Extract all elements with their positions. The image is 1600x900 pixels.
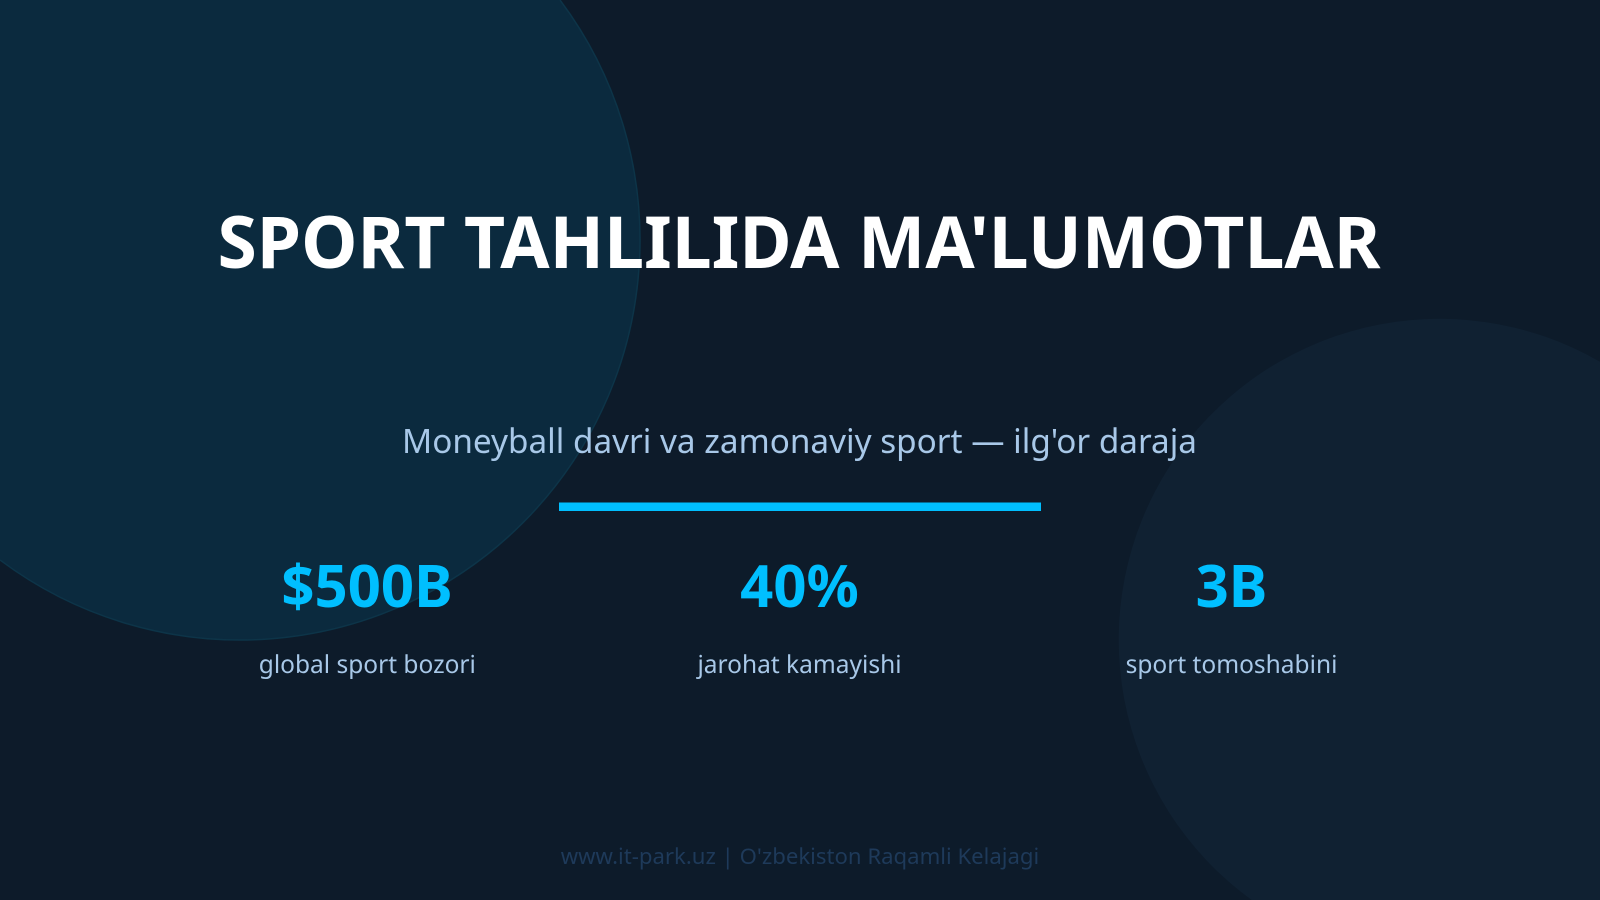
stat value: 40%: 40% bbox=[740, 545, 859, 624]
stat value: $500B: $500B bbox=[281, 545, 453, 624]
subtitle: Moneyball davri va zamonaviy sport — ilg'or daraja bbox=[402, 417, 1197, 463]
accent bar bbox=[559, 502, 1041, 511]
stat: global sport market bbox=[259, 545, 476, 681]
stat: sport audience bbox=[1126, 545, 1337, 681]
stat label: global sport bozori: global sport bozori bbox=[259, 648, 476, 681]
background circle: bottom right bbox=[1119, 319, 1600, 900]
stat: injury reduction bbox=[695, 545, 902, 681]
stat label: jarohat kamayishi: jarohat kamayishi bbox=[695, 648, 902, 681]
stat value: 3B: 3B bbox=[1196, 545, 1267, 624]
footer: www.it-park.uz | O'zbekiston Raqamli Kelajagi bbox=[561, 841, 1039, 871]
background circle: top left bbox=[0, 0, 640, 640]
title: SPORT TAHLILIDA MA'LUMOTLAR bbox=[218, 192, 1381, 290]
stat label: sport tomoshabini: sport tomoshabini bbox=[1126, 648, 1337, 681]
